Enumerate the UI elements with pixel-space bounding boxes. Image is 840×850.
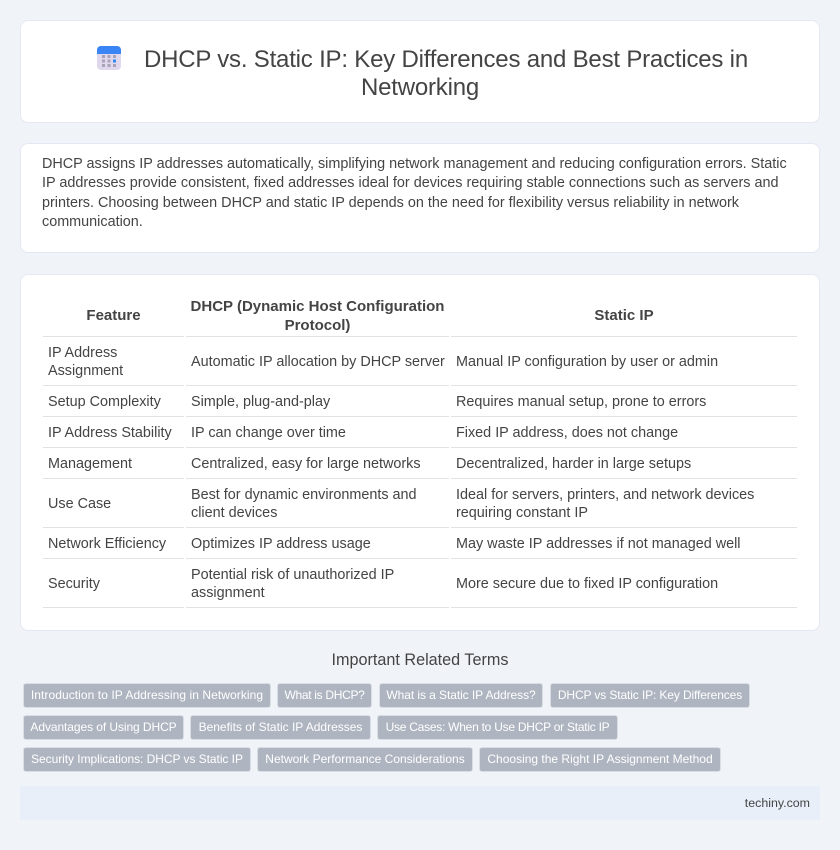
table rows: IP can change over time — [191, 425, 346, 441]
related terms heading: Important Related Terms — [332, 651, 508, 669]
footer bar — [20, 786, 820, 820]
table rows: Network Efficiency — [48, 536, 166, 552]
related terms tags: Network Performance Considerations — [265, 752, 465, 766]
title: DHCP vs. Static IP: Key Differences and Best Practices in — [144, 46, 748, 73]
table rows: IP Address — [48, 345, 117, 361]
table rows: client devices — [191, 505, 277, 521]
table header: Protocol) — [285, 317, 350, 334]
footer source: techiny.com — [745, 796, 810, 810]
table rows: Simple, plug-and-play — [191, 394, 330, 410]
table rows: Optimizes IP address usage — [191, 536, 371, 552]
related terms tags: What is a Static IP Address? — [386, 688, 536, 702]
table rows: requiring constant IP — [456, 505, 588, 521]
intro card — [20, 143, 820, 253]
table rows: Potential risk of unauthorized IP — [191, 567, 394, 583]
header card — [20, 20, 820, 123]
table rows: Assignment — [48, 363, 123, 379]
title: Networking — [361, 74, 479, 101]
related terms tags: What is DHCP? — [284, 688, 365, 702]
table header: Feature — [86, 307, 141, 324]
table rows: Use Case — [48, 496, 111, 512]
table rows: Best for dynamic environments and — [191, 487, 417, 503]
table rows: Centralized, easy for large networks — [191, 456, 421, 472]
intro text: communication. — [42, 214, 143, 230]
related terms tags — [23, 683, 750, 772]
table rows: Decentralized, harder in large setups — [456, 456, 691, 472]
table rows: Automatic IP allocation by DHCP server — [191, 354, 445, 370]
intro text: IP addresses provide consistent, fixed addresses ideal for devices requiring stable connections such as servers and — [42, 175, 778, 191]
table rows — [43, 336, 797, 608]
related terms tags: Security Implications: DHCP vs Static IP — [31, 752, 243, 766]
related terms tags: DHCP vs Static IP: Key Differences — [558, 688, 742, 702]
related terms tags: Use Cases: When to Use DHCP or Static IP — [386, 720, 609, 734]
table rows: Management — [48, 456, 132, 472]
table rows: Security — [48, 576, 100, 592]
table rows: Manual IP configuration by user or admin — [456, 354, 718, 370]
intro text: printers. Choosing between DHCP and static IP depends on the need for flexibility versus reliability in network — [42, 195, 739, 211]
table header: DHCP (Dynamic Host Configuration — [191, 298, 444, 315]
table rows: More secure due to fixed IP configuration — [456, 576, 718, 592]
table rows: Setup Complexity — [48, 394, 161, 410]
related terms tags: Advantages of Using DHCP — [30, 720, 177, 734]
intro text — [42, 156, 787, 230]
icon: calendar — [97, 46, 121, 70]
table rows: Requires manual setup, prone to errors — [456, 394, 706, 410]
related terms tags: Choosing the Right IP Assignment Method — [487, 752, 713, 766]
intro text: DHCP assigns IP addresses automatically, simplifying network management and reducing configuration errors. Static — [42, 156, 787, 172]
table rows: Ideal for servers, printers, and network devices — [456, 487, 754, 503]
related terms tags: Introduction to IP Addressing in Networking — [31, 688, 263, 702]
title — [144, 46, 748, 101]
table header — [86, 298, 654, 334]
table header: Static IP — [594, 307, 654, 324]
related terms tags: Benefits of Static IP Addresses — [199, 720, 362, 734]
table rows: IP Address Stability — [48, 425, 172, 441]
comparison table panel — [20, 274, 820, 631]
table rows: May waste IP addresses if not managed well — [456, 536, 740, 552]
table rows: Fixed IP address, does not change — [456, 425, 678, 441]
table rows: assignment — [191, 585, 265, 601]
